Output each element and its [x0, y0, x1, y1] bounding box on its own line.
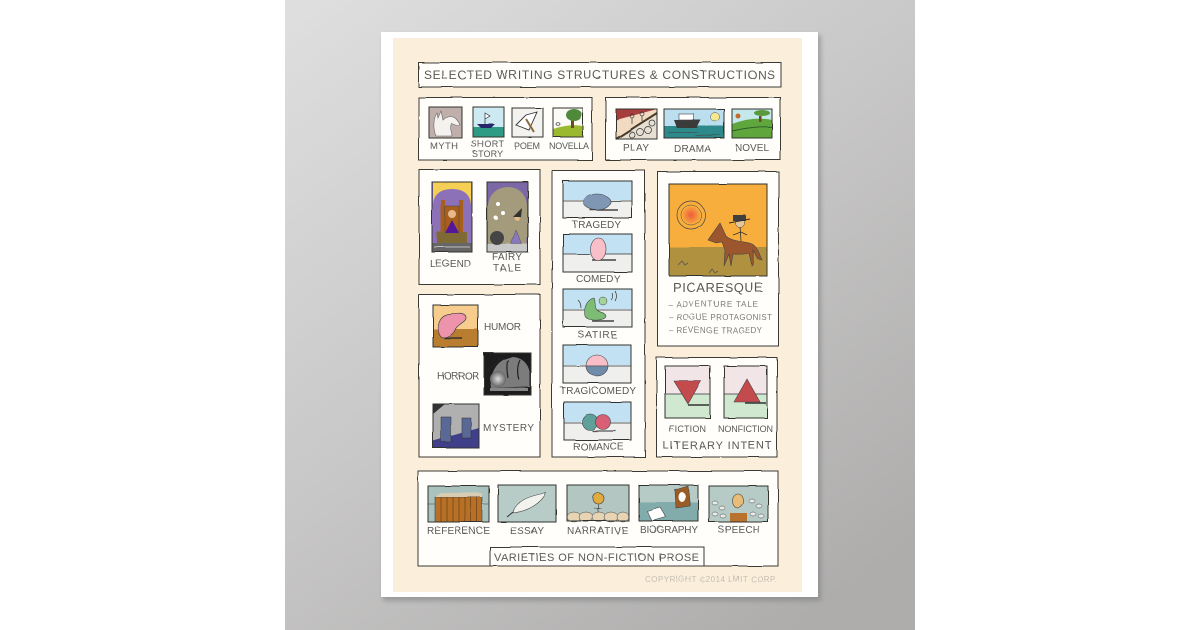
heading: varieties of non-fiction prose [490, 547, 704, 566]
icon: romance [564, 402, 631, 440]
label: novel: NOVEL [735, 143, 769, 154]
icon: play [616, 109, 657, 139]
icon: speech [709, 486, 768, 522]
title: SELECTED WRITING STRUCTURES & CONSTRUCTIONS [424, 68, 775, 82]
label: fairy tale: FAIRY [492, 252, 522, 263]
label: fiction: FICTION [669, 424, 706, 434]
icon: nonfiction [724, 366, 767, 418]
list: picaresque traits [668, 300, 772, 335]
label: mystery: MYSTERY [483, 423, 534, 434]
icon: myth [429, 107, 462, 138]
label: reference: REFERENCE [427, 526, 490, 537]
label: narrative: NARRATIVE [567, 526, 628, 537]
copyright: COPYRIGHT ©2014 LMIT CORP. [645, 575, 777, 584]
label: tragicomedy: TRAGICOMEDY [560, 386, 636, 397]
panel: legend and fairy tale [419, 170, 540, 284]
icon: novel [732, 109, 772, 138]
icon: drama [664, 109, 724, 138]
label: poem: POEM [514, 141, 540, 151]
icon: mystery [433, 404, 479, 448]
icon: legend [432, 182, 472, 252]
icon: humor [433, 305, 478, 347]
panel: non-fiction prose [418, 471, 778, 566]
label: tragedy: TRAGEDY [572, 220, 621, 231]
label: nonfiction: NONFICTION [718, 424, 773, 434]
icon: short story [473, 107, 504, 137]
label: comedy: COMEDY [576, 274, 620, 285]
label: short story: STORY [472, 149, 503, 159]
panel: tragedy comedy column [552, 170, 645, 457]
icon: poem [512, 108, 543, 137]
label: satire: SATIRE [578, 330, 617, 341]
label: horror: HORROR [437, 371, 479, 382]
panel: picaresque [658, 172, 778, 346]
label: biography: BIOGRAPHY [640, 525, 698, 536]
label: short story: SHORT [471, 139, 504, 149]
wall background [285, 0, 915, 630]
label: play: PLAY [623, 143, 649, 154]
icon: tragicomedy [563, 345, 631, 383]
poster shadow [383, 35, 821, 601]
label: humor: HUMOR [484, 322, 521, 333]
label: literary intent: LITERARY INTENT [663, 440, 772, 452]
label: picaresque: PICARESQUE [673, 280, 763, 295]
label: speech: SPEECH [718, 525, 760, 536]
list: picaresque traits: – ADVENTURE TALE [668, 300, 758, 309]
label: novella: NOVELLA [549, 141, 589, 151]
cream sheet [393, 38, 802, 592]
icon: novella [553, 108, 583, 137]
label: essay: ESSAY [510, 526, 544, 537]
list: picaresque traits: – ROGUE PROTAGONIST [669, 313, 772, 322]
label: drama: DRAMA [674, 144, 711, 155]
label: romance: ROMANCE [573, 442, 624, 453]
icon: tragedy [563, 181, 632, 218]
icon: horror [484, 353, 531, 395]
panel: short forms [418, 98, 592, 160]
icon: picaresque illustration [669, 184, 767, 276]
title [418, 62, 781, 87]
panel: humor horror mystery [419, 294, 540, 457]
icon: biography [639, 485, 698, 521]
icon: reference [428, 486, 489, 522]
heading: varieties of non-fiction prose: VARIETIES OF NON-FICTION PROSE [494, 552, 699, 564]
label: fairy tale: TALE [493, 263, 521, 274]
panel: long forms [606, 98, 780, 160]
label: short story [471, 139, 504, 159]
icon: narrative [567, 485, 629, 522]
icon: satire [563, 289, 632, 327]
label: myth: MYTH [430, 141, 458, 152]
icon: essay [498, 485, 556, 522]
list: picaresque traits: – REVENGE TRAGEDY [669, 326, 763, 335]
icon: comedy [563, 234, 632, 272]
icon: fiction [665, 366, 710, 418]
label: fairy tale [492, 252, 522, 274]
poster [381, 32, 818, 597]
label: legend: LEGEND [430, 259, 471, 270]
panel: literary intent [656, 358, 777, 457]
icon: fairy tale [487, 182, 528, 252]
